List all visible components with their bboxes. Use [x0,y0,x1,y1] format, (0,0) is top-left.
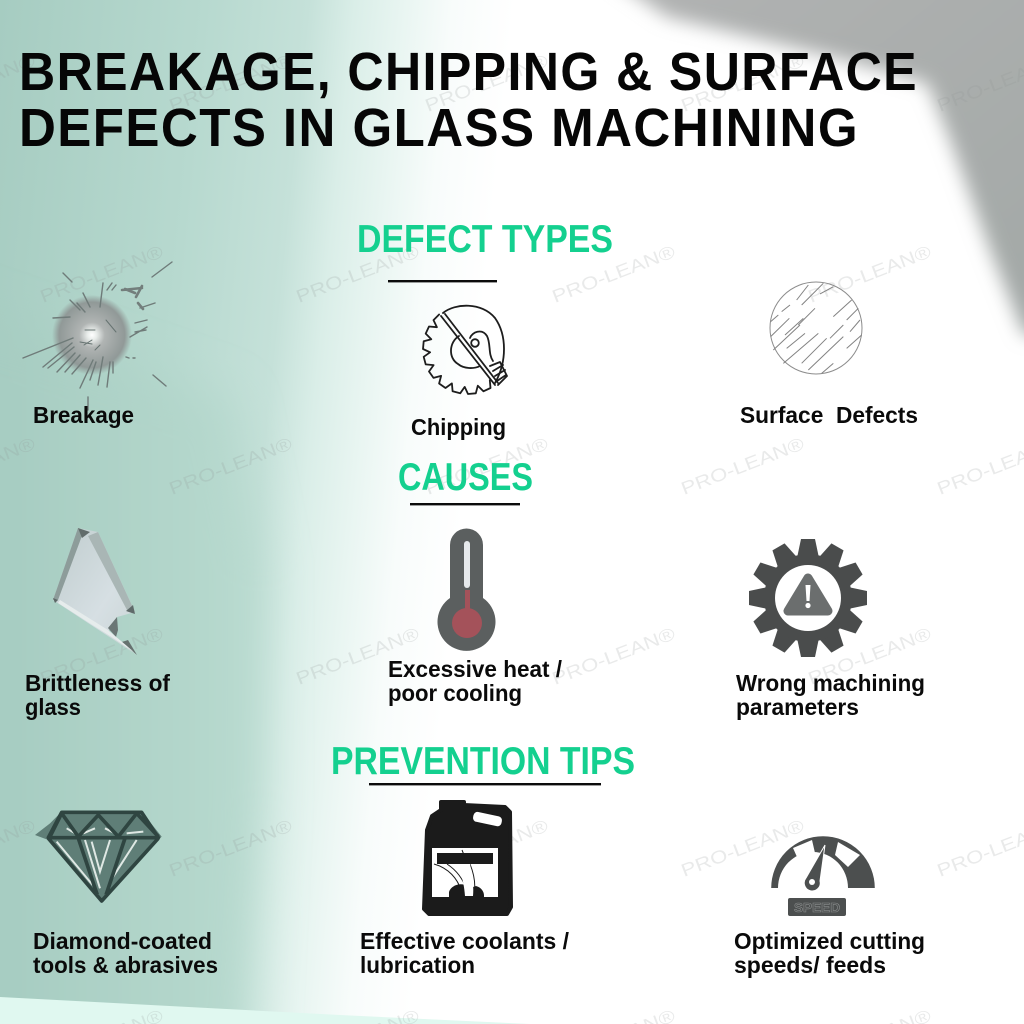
label: excessive heat / poor cooling: poor cooling [388,680,522,706]
watermarks: PRO-LEAN: PRO-LEAN® [166,50,295,116]
watermarks: PRO-LEAN: PRO-LEAN® [805,241,934,307]
title [19,42,918,158]
watermarks: PRO-LEAN: PRO-LEAN® [805,623,934,689]
watermarks: PRO-LEAN: PRO-LEAN® [549,623,678,689]
label: optimized cutting speeds / feeds [734,928,925,978]
label: chipping: Chipping [411,414,506,440]
icon: speed gauge: SPEED [794,900,840,915]
icon: glass breakage burst [23,262,172,410]
panel: defect types [23,218,918,440]
label: brittleness of glass: glass [25,694,81,720]
label: breakage: Breakage [33,402,134,428]
label: effective coolants / lubrication: Effective coolants / [360,928,570,954]
icon: broken glass shard [53,528,137,655]
watermarks: PRO-LEAN: PRO-LEAN® [422,815,551,881]
heading: defect types: DEFECT TYPES [357,218,613,261]
label: wrong machining parameters: parameters [736,694,859,720]
label: optimized cutting speeds / feeds: Optimized cutting [734,928,925,954]
title: BREAKAGE, CHIPPING & SURFACE [19,42,918,102]
label: diamond-coated tools & abrasives: tools & abrasives [33,952,218,978]
label: effective coolants / lubrication: lubrication [360,952,475,978]
watermarks: PRO-LEAN: PRO-LEAN® [678,815,807,881]
icon: thermometer [437,528,496,651]
watermarks: PRO-LEAN: PRO-LEAN® [678,50,807,116]
label: brittleness of glass: Brittleness of [25,670,170,696]
panel: prevention tips [33,740,925,978]
label: effective coolants / lubrication [360,928,570,978]
watermarks: PRO-LEAN: PRO-LEAN® [166,433,295,499]
label: wrong machining parameters [736,670,925,720]
heading: causes: CAUSES [398,456,533,499]
title: DEFECTS IN GLASS MACHINING [19,98,859,158]
label: excessive heat / poor cooling [388,656,563,706]
heading: prevention tips: PREVENTION TIPS [331,740,635,783]
icon: warning gear [749,539,867,657]
label: diamond-coated tools & abrasives [33,928,218,978]
label: optimized cutting speeds / feeds: speeds/ feeds [734,952,886,978]
icon: chipping gear and bulb [423,306,507,394]
label: wrong machining parameters: Wrong machining [736,670,925,696]
icon: diamond [35,812,162,902]
label: brittleness of glass [25,670,170,720]
watermarks: PRO-LEAN: PRO-LEAN® [549,241,678,307]
watermarks: PRO-LEAN: PRO-LEAN® [678,433,807,499]
label: excessive heat / poor cooling: Excessive heat / [388,656,563,682]
watermarks: PRO-LEAN: PRO-LEAN® [422,433,551,499]
watermarks: PRO-LEAN: PRO-LEAN® [422,50,551,116]
label: surface defects: Surface Defects [740,402,918,428]
watermarks: PRO-LEAN: PRO-LEAN® [166,815,295,881]
icon: surface defects scratched circle [770,282,862,374]
watermarks: PRO-LEAN: PRO-LEAN® [293,241,422,307]
watermarks: PRO-LEAN: PRO-LEAN® [293,623,422,689]
watermarks: PRO-LEAN: PRO-LEAN® [37,623,166,689]
icon: speed gauge [772,837,874,916]
panel: causes [25,456,925,720]
watermarks: PRO-LEAN: PRO-LEAN® [37,241,166,307]
label: diamond-coated tools & abrasives: Diamond-coated [33,928,212,954]
icon: coolant jug [424,802,511,914]
